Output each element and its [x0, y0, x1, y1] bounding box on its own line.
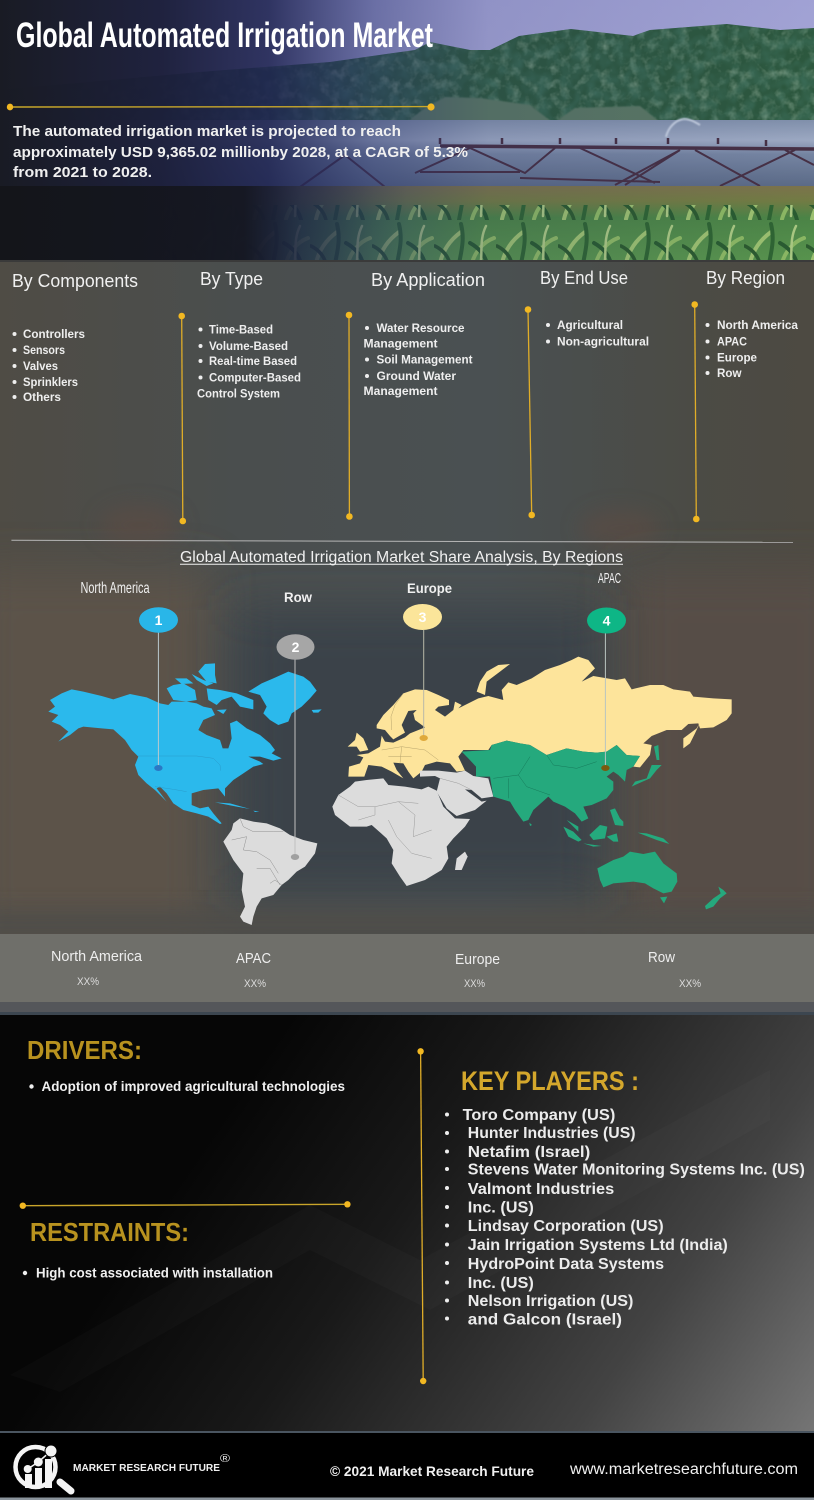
list: region: Europe: [717, 350, 757, 364]
map region: APAC: [462, 741, 727, 909]
icon: logo magnifier with bars: [16, 1445, 71, 1491]
list: components: Sensors: [23, 343, 65, 357]
column: By Components: [12, 271, 138, 404]
stat: North America: [51, 948, 143, 988]
column: By Type: [197, 269, 301, 400]
list: key players: and Galcon (Israel): [468, 1311, 622, 1328]
list: components: Others: [23, 390, 61, 404]
stat: APAC: XX%: [244, 978, 266, 990]
panel: footer: [0, 1431, 814, 1500]
heading: Key Players: KEY PLAYERS :: [461, 1066, 639, 1096]
list: key players: Jain Irrigation Systems Ltd (India): [468, 1237, 728, 1254]
list: components: Controllers: [23, 327, 85, 341]
text block: market summary: approximately USD 9,365.02 millionby 2028, at a CAGR of 5.3%: [13, 144, 468, 161]
corn field: [0, 186, 814, 261]
list: type: Real-time Based: [209, 354, 297, 368]
heading: Drivers: DRIVERS:: [27, 1035, 142, 1065]
pin: APAC: 4: [603, 612, 611, 628]
heading: By Region: By Region: [706, 268, 785, 288]
list: region: North America: [717, 318, 798, 332]
list: key players: Netafim (Israel): [468, 1144, 590, 1161]
pin: North America: [80, 580, 178, 771]
water field: [0, 120, 814, 188]
heading: By End Use: By End Use: [540, 268, 628, 288]
list: key players: Nelson Irrigation (US): [468, 1293, 633, 1310]
pin: Row: 2: [292, 639, 300, 655]
map region: Row (South America): [223, 818, 317, 925]
stat: North America: XX%: [77, 976, 99, 988]
column: By Region: [706, 268, 798, 380]
map region: Europe and Russia: [348, 657, 732, 778]
website: www.marketresearchfuture.com: [569, 1461, 798, 1478]
stat: Europe: [455, 951, 500, 990]
truss: [300, 138, 814, 187]
stat: Row: XX%: [679, 978, 701, 990]
column: By End Use: [540, 268, 649, 348]
heading: title: Global Automated Irrigation Market: [16, 16, 433, 55]
divider: gold horizontal rule: [20, 1201, 351, 1209]
map region: Row (Africa and Middle East): [332, 771, 493, 886]
list: application: Water Resource: [376, 321, 465, 335]
list: type: Time-Based: [209, 322, 273, 336]
list: components: Sprinklers: [23, 375, 78, 389]
pin: APAC: [587, 570, 626, 771]
list: key players: Toro Company (US): [463, 1107, 615, 1124]
stat: Row: [648, 949, 701, 990]
list: key players: Inc. (US): [468, 1200, 534, 1217]
pin: Europe: Europe: [407, 581, 452, 596]
pin: North America: North America: [80, 580, 150, 597]
map region: North America: [48, 663, 322, 824]
list: key players: Lindsay Corporation (US): [468, 1218, 664, 1235]
text block: market summary: The automated irrigation market is projected to reach: [13, 123, 401, 140]
stat: Row: Row: [648, 949, 675, 966]
stat: Europe: Europe: [455, 951, 500, 968]
list: type: [197, 322, 301, 400]
pin: North America: 1: [155, 612, 163, 628]
text block: market summary: from 2021 to 2028.: [13, 164, 152, 181]
list: application: Ground Water: [376, 369, 456, 383]
list: type: Control System: [197, 386, 280, 400]
heading: Restraints: RESTRAINTS:: [30, 1217, 189, 1247]
overlays: [0, 0, 814, 261]
logo wordmark: MARKET RESEARCH FUTURE: [73, 1463, 220, 1474]
pin: Row: Row: [284, 590, 312, 605]
heading: market share analysis: Global Automated Irrigation Market Share Analysis, By Regions: [180, 549, 623, 566]
list: components: Valves: [23, 359, 58, 373]
dividers: gold vertical column rules: [11, 301, 793, 542]
list: region: [706, 318, 798, 380]
pin: APAC: APAC: [598, 570, 621, 587]
list: application: Management: [364, 336, 438, 350]
list: region: APAC: [717, 334, 747, 348]
list: region: Row: [717, 366, 742, 380]
bullet: restraint: High cost associated with installation: [36, 1265, 273, 1281]
list: type: Computer-Based: [209, 370, 301, 384]
heading: By Type: By Type: [200, 269, 263, 289]
text block: market summary: [13, 123, 468, 181]
list: end use: Agricultural: [557, 318, 623, 332]
column: By Application: [364, 270, 485, 398]
divider: title rule with gold dots: [7, 103, 435, 111]
stat: Europe: XX%: [464, 978, 485, 990]
stat: APAC: [236, 950, 271, 990]
bullet: driver: Adoption of improved agricultural technologies: [42, 1078, 345, 1094]
list: key players: Valmont Industries: [468, 1181, 614, 1198]
list: application: Management: [364, 384, 438, 398]
heading: By Components: By Components: [12, 271, 138, 291]
list: key players: HydroPoint Data Systems: [468, 1256, 664, 1273]
pin: Europe: 3: [419, 609, 427, 625]
world map: [48, 657, 732, 925]
list: end use: [546, 318, 649, 348]
list: type: Volume-Based: [209, 339, 288, 353]
panel: drivers, restraints and key players background: [0, 1015, 814, 1432]
trees: [185, 24, 814, 120]
divider: gold vertical rule: [417, 1048, 426, 1384]
list: application: [364, 321, 472, 398]
list: key players: Inc. (US): [468, 1275, 534, 1292]
heading: By Application: By Application: [371, 270, 485, 290]
panel: regional share strip: [0, 934, 814, 1015]
pin: Row: [276, 590, 314, 860]
list: application: Soil Management: [376, 352, 472, 366]
registered mark: ®: [220, 1453, 230, 1465]
panel: hero irrigation photo background: [0, 0, 814, 261]
stat: North America: North America: [51, 948, 143, 965]
list: components: [12, 327, 85, 404]
pin: Europe: [403, 581, 452, 741]
list: key players: Stevens Water Monitoring Systems Inc. (US): [468, 1162, 805, 1179]
list: end use: Non-agricultural: [557, 334, 649, 348]
stat: APAC: APAC: [236, 950, 271, 967]
list: key players: [445, 1107, 805, 1328]
copyright: © 2021 Market Research Future: [330, 1463, 534, 1479]
list: key players: Hunter Industries (US): [468, 1125, 636, 1142]
panel: segments and map backdrop: [0, 260, 814, 1015]
